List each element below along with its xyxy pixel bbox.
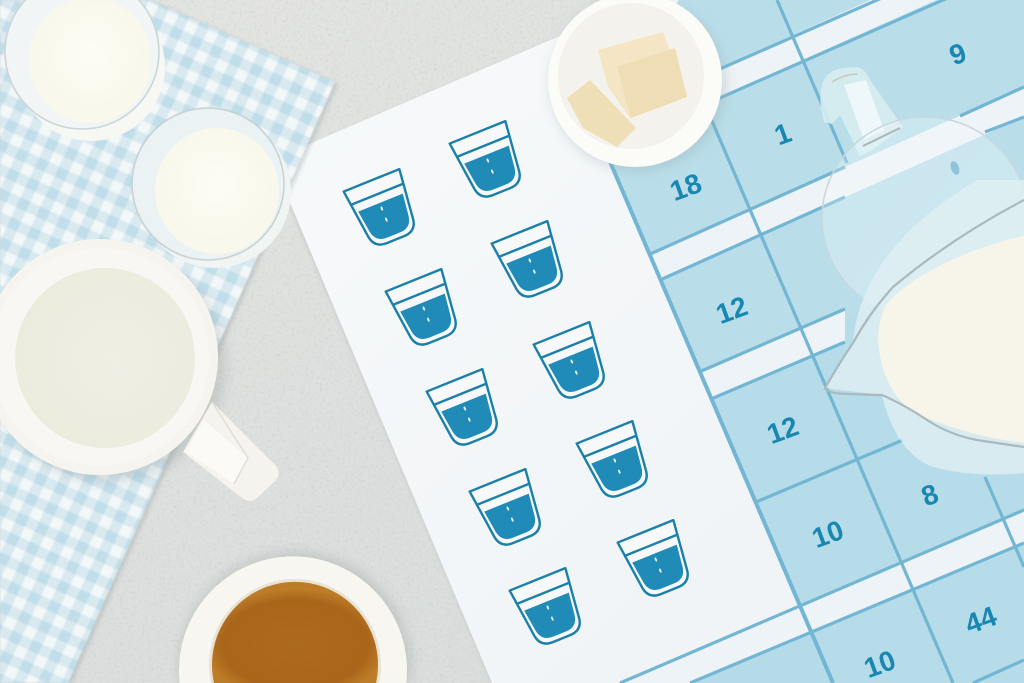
icon: water glass 10 <box>510 568 589 650</box>
pitcher front body <box>825 180 1024 474</box>
pitcher back body <box>822 117 1024 319</box>
glass of milk, top left <box>5 0 165 141</box>
icon: water glass 9 <box>618 520 697 602</box>
calendar numbers: 18 <box>666 167 706 207</box>
icon: water glass 5 <box>427 369 506 451</box>
calendar numbers: 10 <box>860 644 900 683</box>
calendar grid <box>605 0 1024 683</box>
icon: water glass 6 <box>534 322 613 404</box>
calendar numbers: 12 <box>763 410 803 450</box>
icon: water glass 4 <box>492 221 571 303</box>
calendar numbers: 10 <box>808 514 848 554</box>
butter cube large <box>598 32 687 118</box>
glass pitcher of milk <box>820 67 1024 474</box>
pitcher rim <box>825 200 1024 447</box>
icon: water glass 2 <box>450 121 529 203</box>
reflection: droplet <box>949 160 961 176</box>
grid lines <box>605 0 1024 683</box>
bowl with butter cubes <box>548 0 726 171</box>
small bowl of amber liquid <box>179 552 411 683</box>
milk surface <box>878 236 1024 443</box>
icon: water glass 7 <box>470 469 549 551</box>
water glass icons <box>344 121 697 650</box>
pitcher handle <box>820 67 903 156</box>
calendar numbers: 12 <box>712 290 752 330</box>
sheet of paper <box>272 0 1024 683</box>
calendar numbers <box>666 37 1001 683</box>
icon: water glass 1 <box>344 169 423 251</box>
white bands <box>620 0 1024 683</box>
icon: water glass 8 <box>577 421 656 503</box>
calendar numbers: 8 <box>917 478 942 512</box>
calendar numbers: 1 <box>770 117 795 151</box>
checked napkin <box>0 0 338 683</box>
small glass of milk <box>132 108 291 268</box>
calendar numbers: 9 <box>945 37 970 71</box>
calendar numbers: 44 <box>961 600 1001 640</box>
butter cube small <box>567 80 636 147</box>
mug handle <box>183 402 279 501</box>
mug of milk <box>0 239 279 501</box>
icon: water glass 3 <box>386 269 465 351</box>
